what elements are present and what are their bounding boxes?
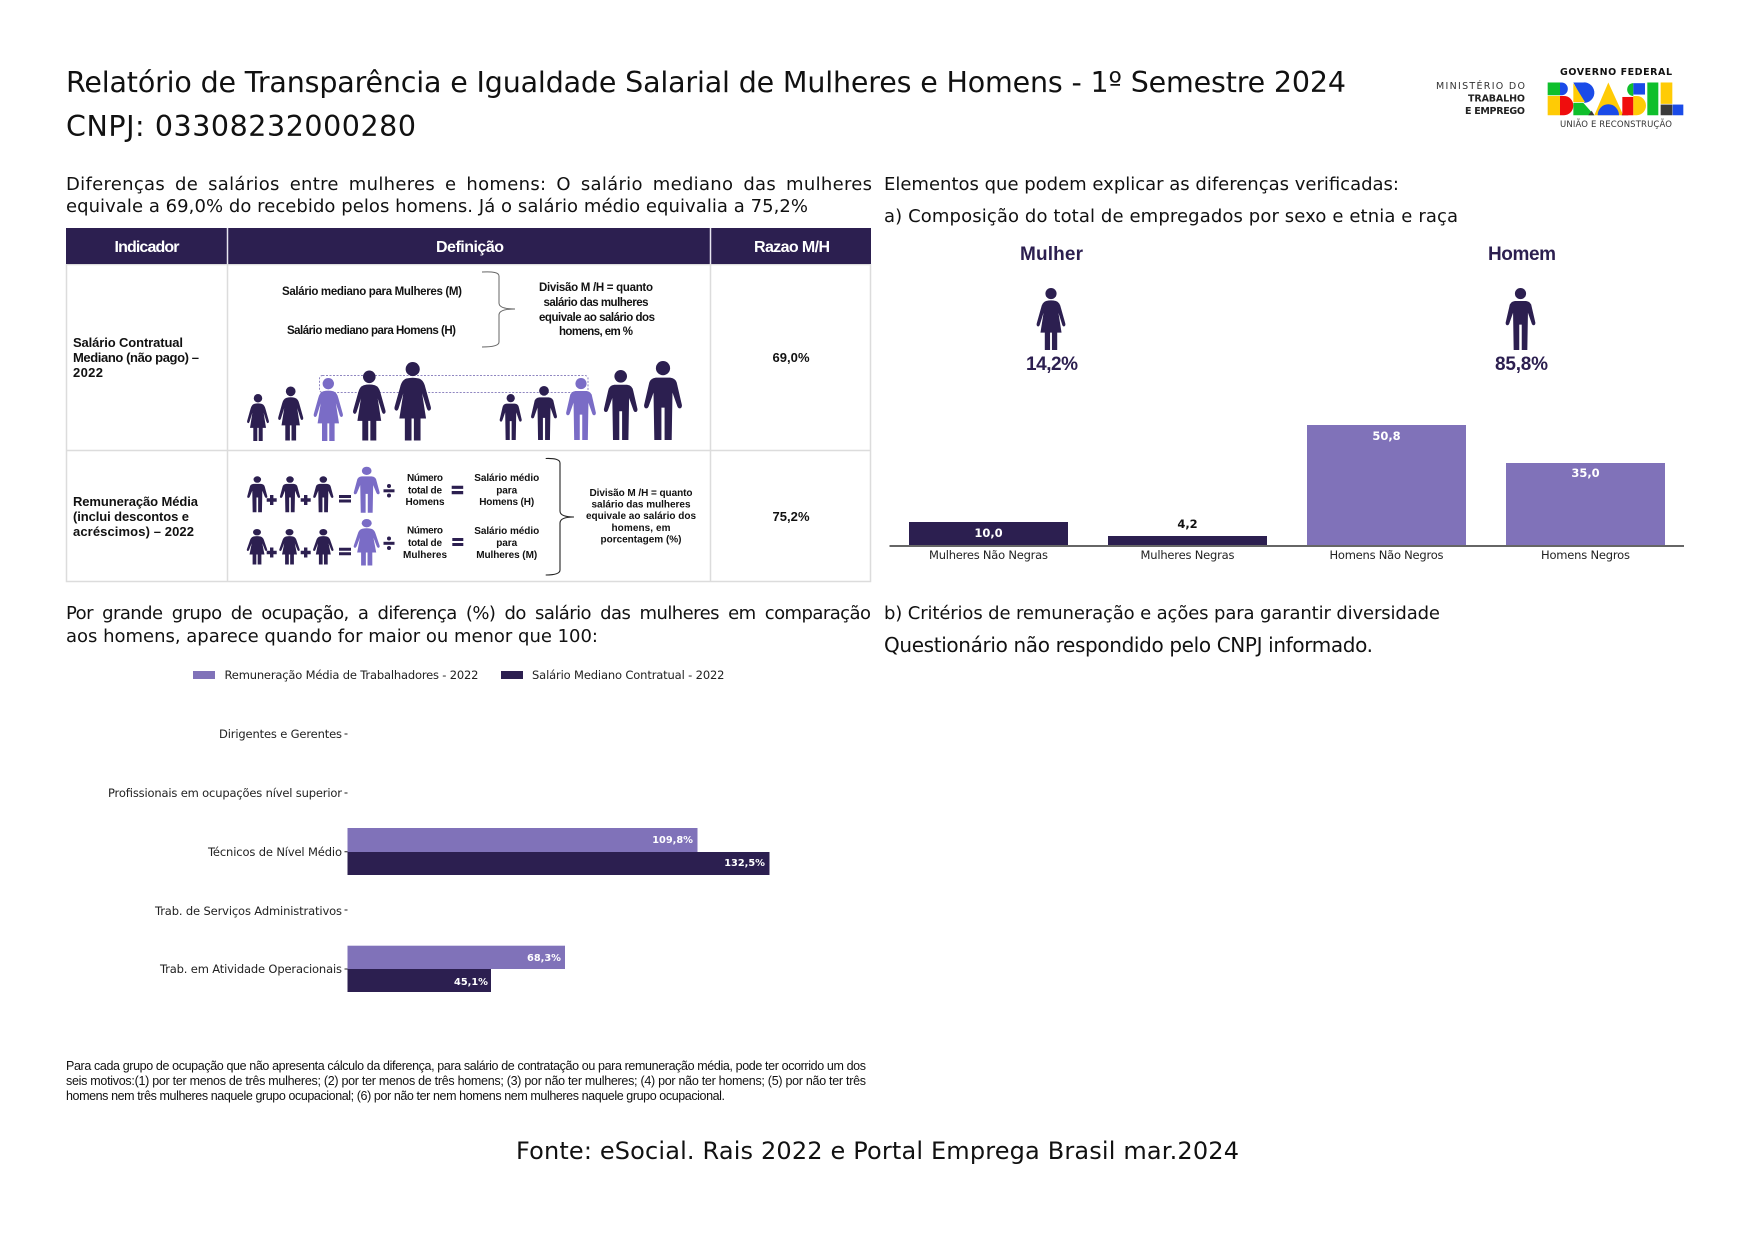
heading: elementos que podem explicar: Elementos que podem explicar as diferenças verificadas: [884, 174, 1399, 195]
logo: ministério e governo federal: GOVERNO FEDERAL [1560, 67, 1672, 78]
logo: ministério e governo federal [1436, 67, 1683, 130]
logo: ministério e governo federal: E EMPREGO [1465, 106, 1525, 117]
footnote [66, 1059, 866, 1103]
text block: por grande grupo de ocupação: aos homens, aparece quando for maior ou menor que 100: [66, 626, 598, 647]
logo: ministério e governo federal: MINISTÉRIO DO [1436, 80, 1525, 92]
definition text: divisão M/H média: salário das mulheres [592, 500, 691, 511]
bar chart: composição por sexo e raça [890, 425, 1684, 562]
definition text: divisão M/H média [586, 488, 696, 546]
bar chart: diferença por ocupação: Trab. em Atividade Operacionais [159, 962, 342, 976]
equation: homens: Salário médio [474, 473, 539, 484]
row label: salário contratual mediano: Mediano (não pago) – [73, 350, 199, 365]
row label: salário contratual mediano: 2022 [73, 365, 103, 380]
chart legend: Salário Mediano Contratual - 2022 [532, 668, 724, 682]
bar chart: composição por sexo e raça: 35,0 [1571, 466, 1600, 480]
definition text: divisão M/H mediano: Divisão M /H = quanto [539, 282, 653, 294]
heading: elementos que podem explicar: a) Composição do total de empregados por sexo e etnia e raça [884, 206, 1458, 227]
panel: composição por sexo [1020, 244, 1556, 375]
definition text: divisão M/H mediano [539, 282, 655, 338]
brace: média [546, 458, 574, 575]
bar chart: composição por sexo e raça: 10,0 [974, 526, 1003, 540]
icons: mulheres em fila [247, 362, 431, 441]
equation: homens [247, 467, 539, 513]
equation: mulheres: Mulheres [403, 550, 447, 561]
label: mulher: 14,2% [1026, 354, 1078, 375]
row label: salário contratual mediano [73, 335, 199, 380]
text block: diferenças de salários: equivale a 69,0% do recebido pelos homens. Já o salário médio equivalia a 75,2% [66, 196, 808, 217]
bar chart: diferença por ocupação: Técnicos de Nível Médio [207, 845, 342, 859]
table header: Definição [436, 239, 504, 256]
definition text: divisão M/H média: porcentagem (%) [600, 535, 682, 546]
bar chart: composição por sexo e raça: Homens Não Negros [1330, 548, 1444, 562]
brace: mediano [482, 272, 515, 347]
bar chart: composição por sexo e raça: 4,2 [1177, 517, 1198, 531]
panel: tabela de indicadores [66, 228, 871, 582]
logo: ministério e governo federal: TRABALHO [1468, 94, 1525, 104]
bar chart: diferença por ocupação: 132,5% [724, 858, 765, 869]
bar chart: diferença por ocupação: Dirigentes e Gerentes [219, 727, 342, 741]
equation: mulheres: total de [408, 538, 442, 549]
text block: critérios de remuneração [884, 603, 1440, 657]
equation: mulheres [247, 519, 539, 566]
equation: homens: Homens [406, 497, 445, 508]
equation: mulheres: Mulheres (M) [476, 550, 537, 561]
text block: critérios de remuneração: b) Critérios de remuneração e ações para garantir diversidade [884, 603, 1440, 624]
table header: Indicador [114, 239, 180, 256]
footnote: Para cada grupo de ocupação que não apresenta cálculo da diferença, para salário de contratação ou para remuneração média, pode ter ocorrido um dos [66, 1059, 866, 1073]
text block: critérios de remuneração: Questionário não respondido pelo CNPJ informado. [884, 633, 1373, 657]
chart legend [193, 668, 724, 682]
text block: diferenças de salários: Diferenças de salários entre mulheres e homens: O salário mediano das mulheres [66, 174, 872, 195]
label: homem: 85,8% [1495, 354, 1548, 375]
value: 69,0%: 69,0% [772, 350, 810, 365]
heading: elementos que podem explicar [884, 174, 1458, 227]
definition text: salário mediano: Salário mediano para Homens (H) [287, 325, 456, 337]
equation: mulheres: Salário médio [474, 526, 539, 537]
bar chart: diferença por ocupação: 68,3% [527, 953, 561, 964]
equation: homens: total de [408, 486, 442, 496]
equation: homens: Número [407, 473, 443, 484]
title [66, 66, 1346, 143]
label: mulher: Mulher [1020, 244, 1084, 265]
table header: Razao M/H [754, 239, 830, 256]
bar chart: composição por sexo e raça: Mulheres Não Negras [929, 548, 1048, 562]
source line: Fonte: eSocial. Rais 2022 e Portal Emprega Brasil mar.2024 [516, 1137, 1239, 1165]
definition text: divisão M/H média: equivale ao salário dos [586, 511, 696, 522]
footnote: homens nem três mulheres naquele grupo ocupacional; (6) por não ter nem homens nem mulheres naquele grupo ocupacional. [66, 1089, 725, 1103]
definition text: divisão M/H mediano: homens, em % [559, 326, 633, 338]
bar chart: composição por sexo e raça: Mulheres Negras [1140, 548, 1234, 562]
text block: por grande grupo de ocupação: Por grande grupo de ocupação, a diferença (%) do salário das mulheres em comparação [66, 603, 871, 624]
definition text: salário mediano: Salário mediano para Mulheres (M) [282, 286, 462, 298]
logo: ministério e governo federal: UNIÃO E RECONSTRUÇÃO [1560, 119, 1672, 130]
bar chart: diferença por ocupação [108, 727, 770, 992]
definition text: divisão M/H mediano: salário das mulheres [544, 297, 648, 309]
bar chart: composição por sexo e raça: Homens Negros [1541, 548, 1630, 562]
definition text: divisão M/H mediano: equivale ao salário dos [539, 312, 655, 324]
bar chart: composição por sexo e raça: 50,8 [1372, 429, 1401, 443]
equation: homens: Homens (H) [479, 497, 534, 508]
label: homem [1488, 244, 1556, 375]
bar chart: diferença por ocupação: Profissionais em ocupações nível superior [108, 786, 342, 800]
bar chart: diferença por ocupação: 109,8% [652, 835, 693, 846]
row label: remuneração média: acréscimos) – 2022 [73, 524, 194, 539]
bar chart: diferença por ocupação: 45,1% [454, 977, 488, 988]
table header [66, 228, 871, 264]
text block: por grande grupo de ocupação [66, 603, 871, 647]
chart legend: Remuneração Média de Trabalhadores - 2022 [224, 668, 478, 682]
title: CNPJ: 03308232000280 [66, 110, 416, 143]
row label: remuneração média: Remuneração Média [73, 494, 199, 509]
dashed highlight [320, 376, 588, 392]
row label: salário contratual mediano: Salário Contratual [73, 335, 183, 350]
row label: remuneração média [73, 494, 199, 539]
bar chart: diferença por ocupação: Trab. de Serviços Administrativos [154, 904, 342, 918]
footnote: seis motivos:(1) por ter menos de três mulheres; (2) por ter menos de três homens; (3) por não ter mulheres; (4) por não ter homens; (5) por não ter três [66, 1074, 866, 1088]
equation: mulheres: Número [407, 526, 443, 536]
equation: mulheres: para [496, 538, 518, 549]
row label: remuneração média: (inclui descontos e [73, 509, 189, 524]
label: homem: Homem [1488, 244, 1556, 265]
equation: homens: para [496, 486, 518, 496]
text block: diferenças de salários [66, 174, 872, 217]
definition text: divisão M/H média: Divisão M /H = quanto [590, 488, 692, 499]
label: mulher [1020, 244, 1084, 375]
definition text: divisão M/H média: homens, em [612, 523, 671, 534]
icons: homens em fila [500, 361, 682, 440]
title: Relatório de Transparência e Igualdade Salarial de Mulheres e Homens - 1º Semestre 2024 [66, 66, 1346, 99]
definition text: salário mediano [282, 286, 462, 337]
value: 75,2%: 75,2% [772, 509, 810, 524]
